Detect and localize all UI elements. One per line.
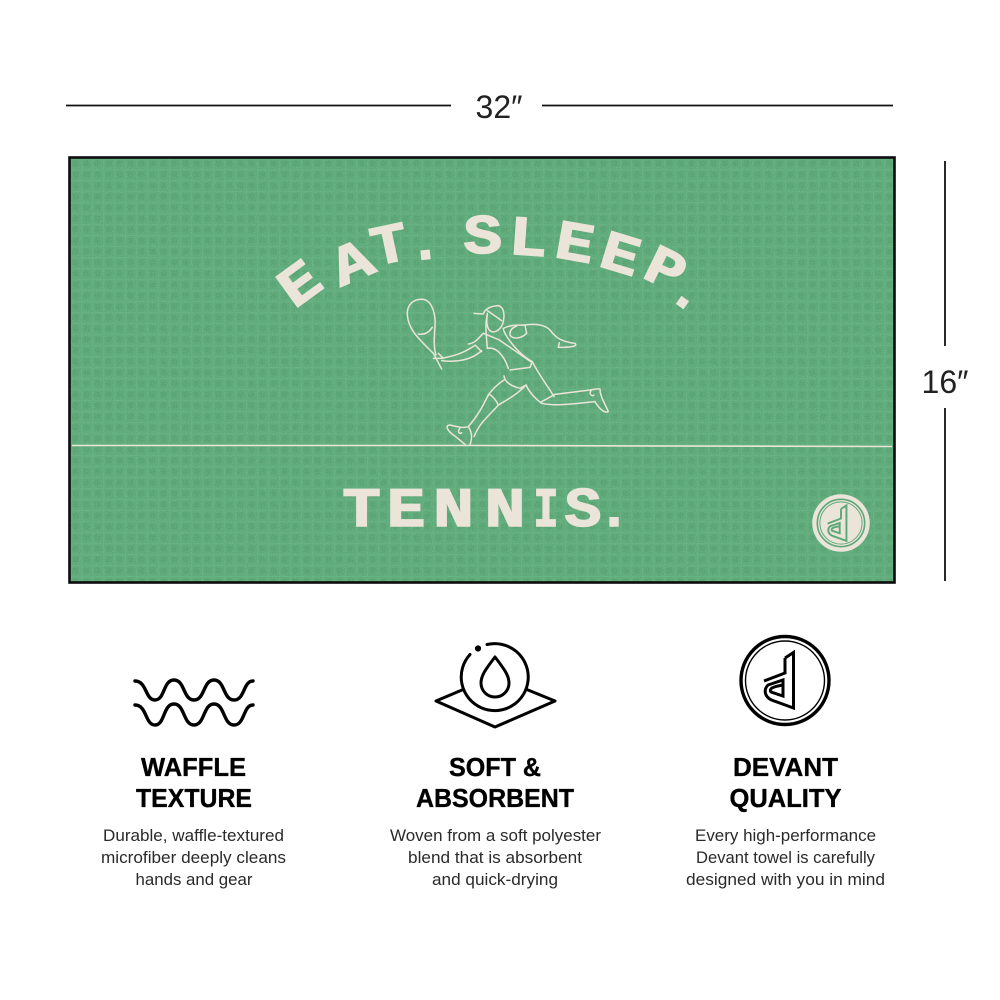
heading: EAT. SLEEP. arched text: T bbox=[365, 213, 415, 283]
text block: microfiber deeply cleans bbox=[101, 849, 286, 867]
heading: EAT. SLEEP. arched text: L bbox=[506, 208, 549, 274]
heading: WAFFLE bbox=[141, 754, 246, 782]
feature: waffle texture bbox=[101, 680, 286, 889]
feature: devant quality bbox=[686, 636, 885, 889]
text block: Devant towel is carefully bbox=[696, 849, 876, 867]
court line bbox=[72, 446, 892, 447]
text block: designed with you in mind bbox=[686, 871, 885, 889]
heading: EAT. SLEEP. arched text: E bbox=[550, 212, 599, 281]
text block bbox=[390, 827, 602, 889]
heading: TENNIS.: S bbox=[565, 479, 601, 543]
text block: Durable, waffle-textured bbox=[103, 827, 284, 845]
heading bbox=[416, 754, 574, 813]
heading: ABSORBENT bbox=[416, 785, 574, 813]
heading: TEXTURE bbox=[136, 785, 252, 813]
heading: QUALITY bbox=[730, 785, 842, 813]
text block bbox=[101, 827, 286, 889]
heading: DEVANT bbox=[733, 754, 838, 782]
text block: Woven from a soft polyester bbox=[390, 827, 602, 845]
heading: TENNIS.: I bbox=[533, 480, 559, 543]
height dimension: 16 inches: 16″ bbox=[922, 364, 968, 400]
panel: green waffle towel bbox=[70, 158, 894, 582]
heading: TENNIS.: . bbox=[597, 479, 631, 543]
heading: EAT. SLEEP. arched text: S bbox=[463, 207, 503, 271]
text block: and quick-drying bbox=[432, 871, 558, 889]
heading: TENNIS.: T bbox=[342, 481, 381, 544]
text block bbox=[686, 827, 885, 889]
text block: hands and gear bbox=[136, 871, 253, 889]
illustration: line-art tennis player bbox=[407, 299, 608, 445]
icon: devant logo bbox=[741, 636, 829, 724]
heading: EAT. SLEEP. arched text: P bbox=[633, 236, 695, 309]
heading bbox=[730, 754, 842, 813]
heading: EAT. SLEEP. arched text: A bbox=[322, 228, 385, 303]
heading: TENNIS.: E bbox=[387, 481, 425, 544]
feature: soft and absorbent bbox=[390, 644, 602, 889]
heading: EAT. SLEEP. arched text: E bbox=[592, 222, 647, 294]
heading bbox=[136, 754, 252, 813]
heading: TENNIS.: N bbox=[433, 479, 474, 543]
width dimension: 32 inches: 32″ bbox=[476, 89, 522, 125]
text block: Every high-performance bbox=[695, 827, 876, 845]
heading: EAT. SLEEP. arched text: E bbox=[268, 250, 336, 324]
heading: TENNIS. bbox=[342, 479, 631, 544]
icon: water drop on towel bbox=[436, 644, 555, 727]
heading: EAT. SLEEP. arched text: . bbox=[404, 211, 444, 278]
icon: waves bbox=[135, 680, 253, 725]
heading: EAT. SLEEP. arched text: . bbox=[656, 258, 721, 330]
text block: blend that is absorbent bbox=[408, 849, 582, 867]
heading: SOFT & bbox=[449, 754, 541, 782]
heading: TENNIS.: N bbox=[485, 479, 525, 543]
heading: EAT. SLEEP. arched text bbox=[268, 207, 721, 330]
icon: towel logo badge bbox=[812, 494, 870, 552]
